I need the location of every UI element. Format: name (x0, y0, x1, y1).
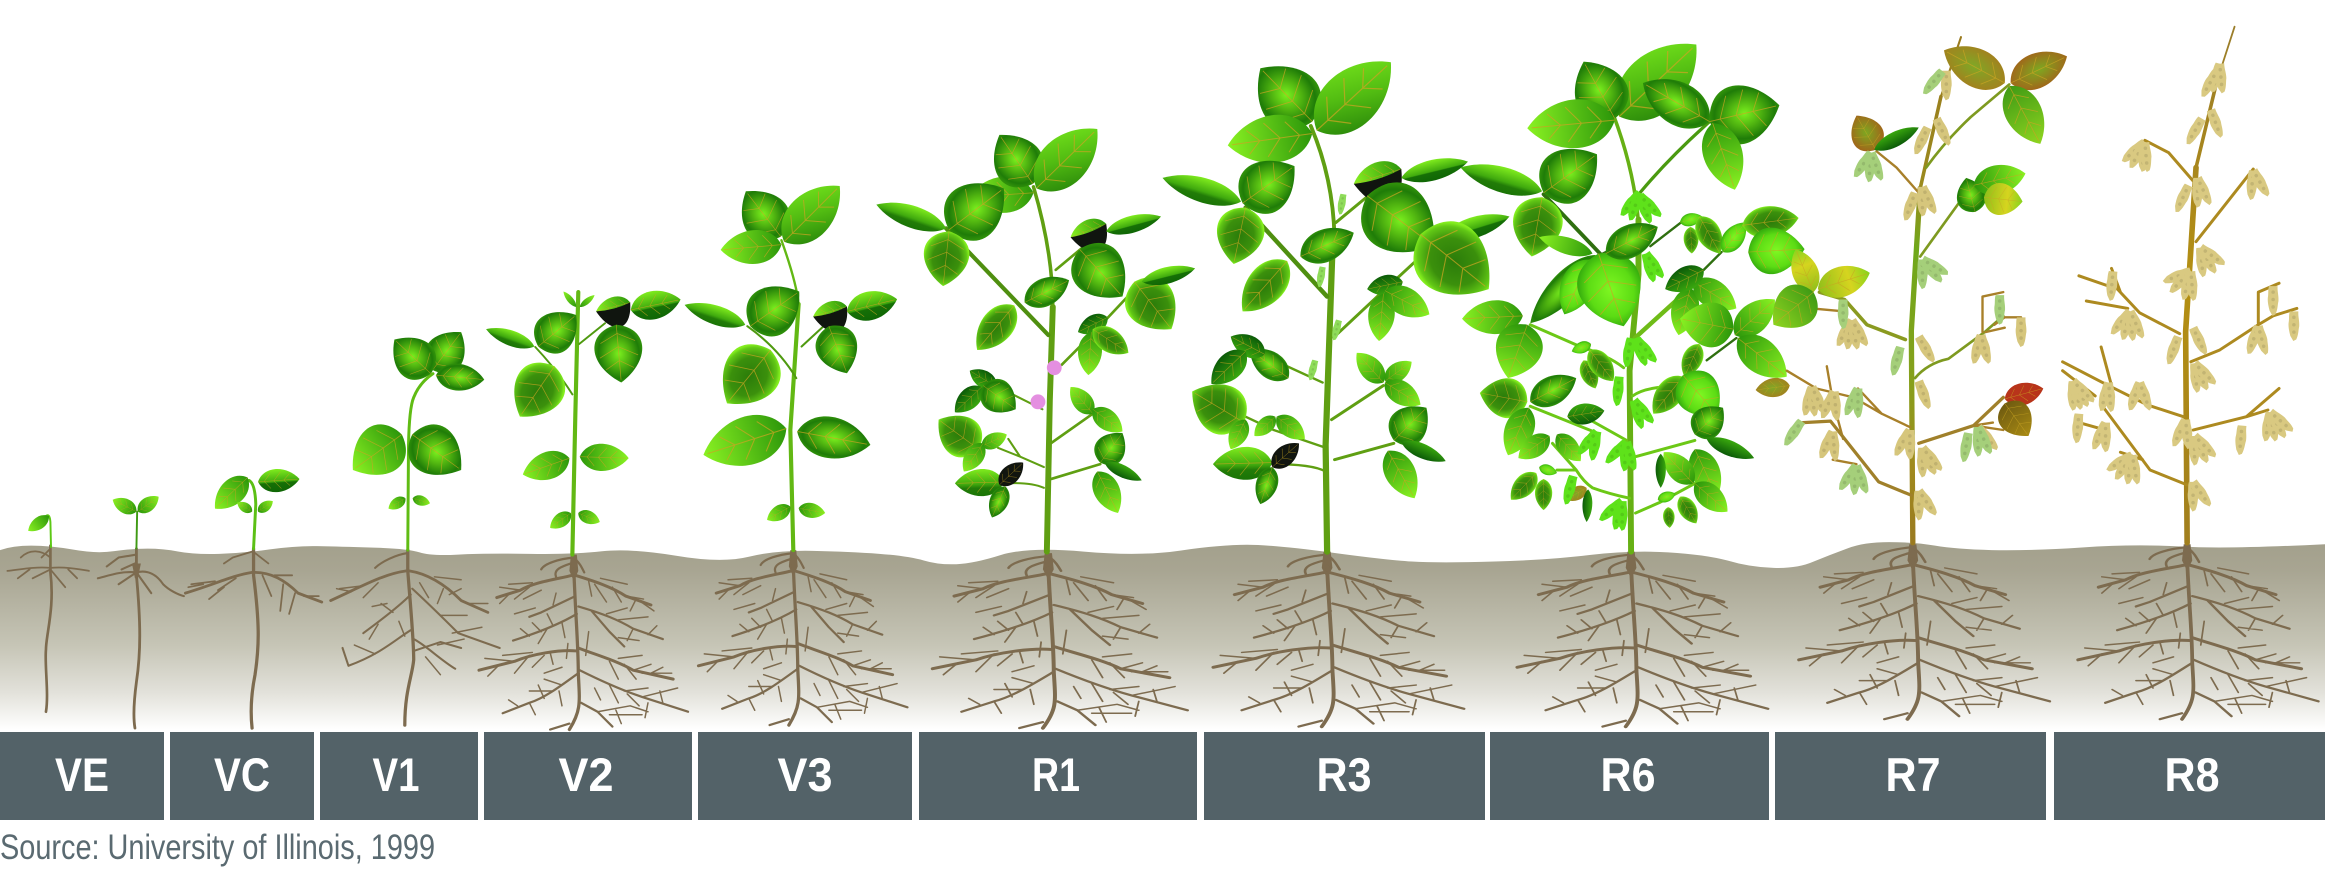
young green pods (1780, 68, 2005, 496)
roots (98, 549, 184, 728)
plant: R3 (1159, 42, 1513, 727)
plant: second seedling (98, 491, 184, 728)
stem and petioles (535, 292, 605, 555)
stage bar: R3 (1204, 732, 1485, 820)
stage bar: V3 (698, 732, 912, 820)
plant: R1 (873, 112, 1197, 728)
stage bar: R6 (1490, 732, 1769, 820)
stage bar: R1 (919, 732, 1197, 820)
plant: R8 (2063, 27, 2318, 719)
stage bar: R6: R6 (1600, 748, 1656, 801)
leaves (682, 171, 900, 526)
stage bar: VC: VC (214, 748, 270, 801)
plant: R6 (1457, 23, 1806, 727)
leaves (1754, 34, 2074, 446)
cotyledons (109, 491, 163, 518)
roots (1799, 544, 2050, 719)
leaves (338, 320, 486, 513)
roots (698, 550, 907, 725)
stipules (1306, 194, 1347, 381)
stem (135, 512, 138, 549)
roots (185, 549, 322, 728)
soil band (0, 542, 2325, 733)
stage bar: V2 (484, 732, 692, 820)
leaves (483, 286, 683, 534)
stage bar: R7: R7 (1886, 748, 1940, 801)
plant: V3 (682, 171, 907, 725)
stem and branches (1787, 37, 2021, 543)
plant: V1 (331, 320, 500, 725)
flowers (1031, 360, 1062, 409)
stage bar: R7 (1775, 732, 2046, 820)
stage bar: VC (170, 732, 314, 820)
stage bar: R8: R8 (2164, 748, 2220, 801)
roots (479, 555, 688, 730)
plant: VE seedling (7, 511, 89, 712)
stage bar: R8 (2054, 732, 2325, 820)
stem and branches (1246, 126, 1438, 552)
stage bar: R1: R1 (1032, 748, 1080, 801)
roots (331, 550, 500, 725)
stem and petioles (747, 240, 825, 550)
mature tan pods (1799, 71, 2026, 520)
stem and branches (2063, 27, 2297, 543)
source note: Source: University of Illinois, 1999 (0, 828, 435, 867)
leaves (1457, 23, 1806, 528)
stage bar: VE: VE (55, 748, 109, 801)
stem (46, 515, 51, 547)
roots (1517, 552, 1768, 727)
roots (1213, 552, 1464, 727)
leaves (1159, 42, 1513, 507)
roots (933, 553, 1188, 728)
stage bar: V2: V2 (558, 748, 614, 801)
stage bar: V1: V1 (372, 748, 420, 801)
stage bar: R3: R3 (1316, 748, 1372, 801)
stem (408, 374, 433, 550)
young lime pods (1560, 189, 1667, 531)
leaves (873, 112, 1197, 521)
stem and branches (946, 187, 1140, 552)
mature tan pods (2068, 62, 2299, 512)
plant: VC (185, 467, 322, 728)
stage bar: V3: V3 (778, 748, 832, 801)
plant: R7 (1754, 34, 2074, 719)
leaves (206, 467, 300, 518)
cotyledon (25, 511, 52, 536)
plant: V2 (479, 286, 688, 730)
roots (2078, 544, 2318, 719)
stage bar: VE (0, 732, 164, 820)
stem and branches (1530, 119, 1736, 552)
roots (7, 546, 89, 712)
stem (249, 480, 256, 549)
stage bar: V1 (320, 732, 478, 820)
